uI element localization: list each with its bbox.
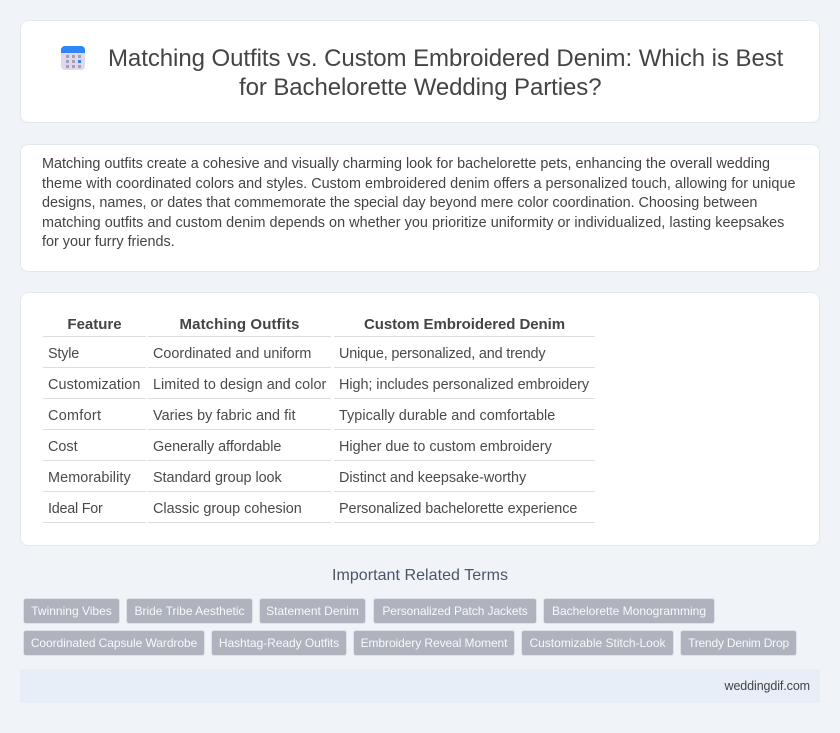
related term tags: Bachelorette Monogramming [552, 604, 706, 618]
table: comparison [43, 316, 595, 523]
related term tags [23, 598, 797, 656]
table: comparison: Ideal For [48, 501, 103, 517]
text block: introduction: designs, names, or dates that commemorate the special day beyond mere color coordination. Choosing between [42, 195, 757, 211]
related term tags: Bride Tribe Aesthetic [134, 604, 245, 618]
table: comparison: Personalized bachelorette experience [339, 501, 577, 517]
text block: introduction: theme with coordinated colors and styles. Custom embroidered denim offers a personalized touch, allowing for unique [42, 176, 796, 192]
table: comparison: Coordinated and uniform [153, 346, 311, 362]
table: comparison: High; includes personalized embroidery [339, 377, 589, 393]
table: comparison: Style [48, 346, 79, 362]
text block: introduction: Matching outfits create a cohesive and visually charming look for bachelorette pets, enhancing the overall wedding [42, 156, 770, 172]
text block: introduction: matching outfits and custom denim depends on whether you prioritize uniformity or individualized, lasting keepsakes [42, 214, 784, 230]
text block: introduction: for your furry friends. [42, 234, 175, 250]
table: comparison: Classic group cohesion [153, 501, 302, 517]
related term tags: Customizable Stitch-Look [529, 636, 666, 650]
table: comparison: Custom Embroidered Denim [364, 316, 565, 333]
table: comparison: Typically durable and comfortable [339, 408, 555, 424]
title: Matching Outfits vs. Custom Embroidered Denim: Which is Best [108, 45, 783, 72]
related term tags: Embroidery Reveal Moment [361, 636, 507, 650]
related term tags: Coordinated Capsule Wardrobe [31, 636, 197, 650]
panel: comparison table [20, 292, 820, 546]
related term tags: Statement Denim [266, 604, 359, 618]
text block: introduction [42, 156, 796, 250]
panel: introduction [20, 144, 820, 272]
table: comparison: Varies by fabric and fit [153, 408, 296, 424]
icon: calendar [61, 46, 85, 70]
table: comparison: Customization [48, 377, 140, 393]
table: comparison: Standard group look [153, 470, 282, 486]
related term tags: Trendy Denim Drop [688, 636, 789, 650]
related term tags: Personalized Patch Jackets [382, 604, 528, 618]
footer [20, 669, 820, 703]
table: comparison: Limited to design and color [153, 377, 326, 393]
panel: header [20, 20, 820, 123]
table: comparison: Memorability [48, 470, 131, 486]
table: comparison: Comfort [48, 408, 101, 424]
table: comparison: Cost [48, 439, 78, 455]
related term tags: Hashtag-Ready Outfits [219, 636, 339, 650]
table: comparison: Generally affordable [153, 439, 281, 455]
table: comparison: Feature [67, 316, 122, 333]
table: comparison: Higher due to custom embroidery [339, 439, 552, 455]
title [108, 45, 784, 101]
table: comparison: Distinct and keepsake-worthy [339, 470, 526, 486]
table: comparison: Matching Outfits [180, 316, 299, 333]
table: comparison: Unique, personalized, and trendy [339, 346, 545, 362]
heading: related terms: Important Related Terms [332, 567, 508, 584]
footer: source text: weddingdif.com [725, 679, 810, 693]
title: for Bachelorette Wedding Parties? [239, 74, 601, 101]
related term tags: Twinning Vibes [31, 604, 112, 618]
